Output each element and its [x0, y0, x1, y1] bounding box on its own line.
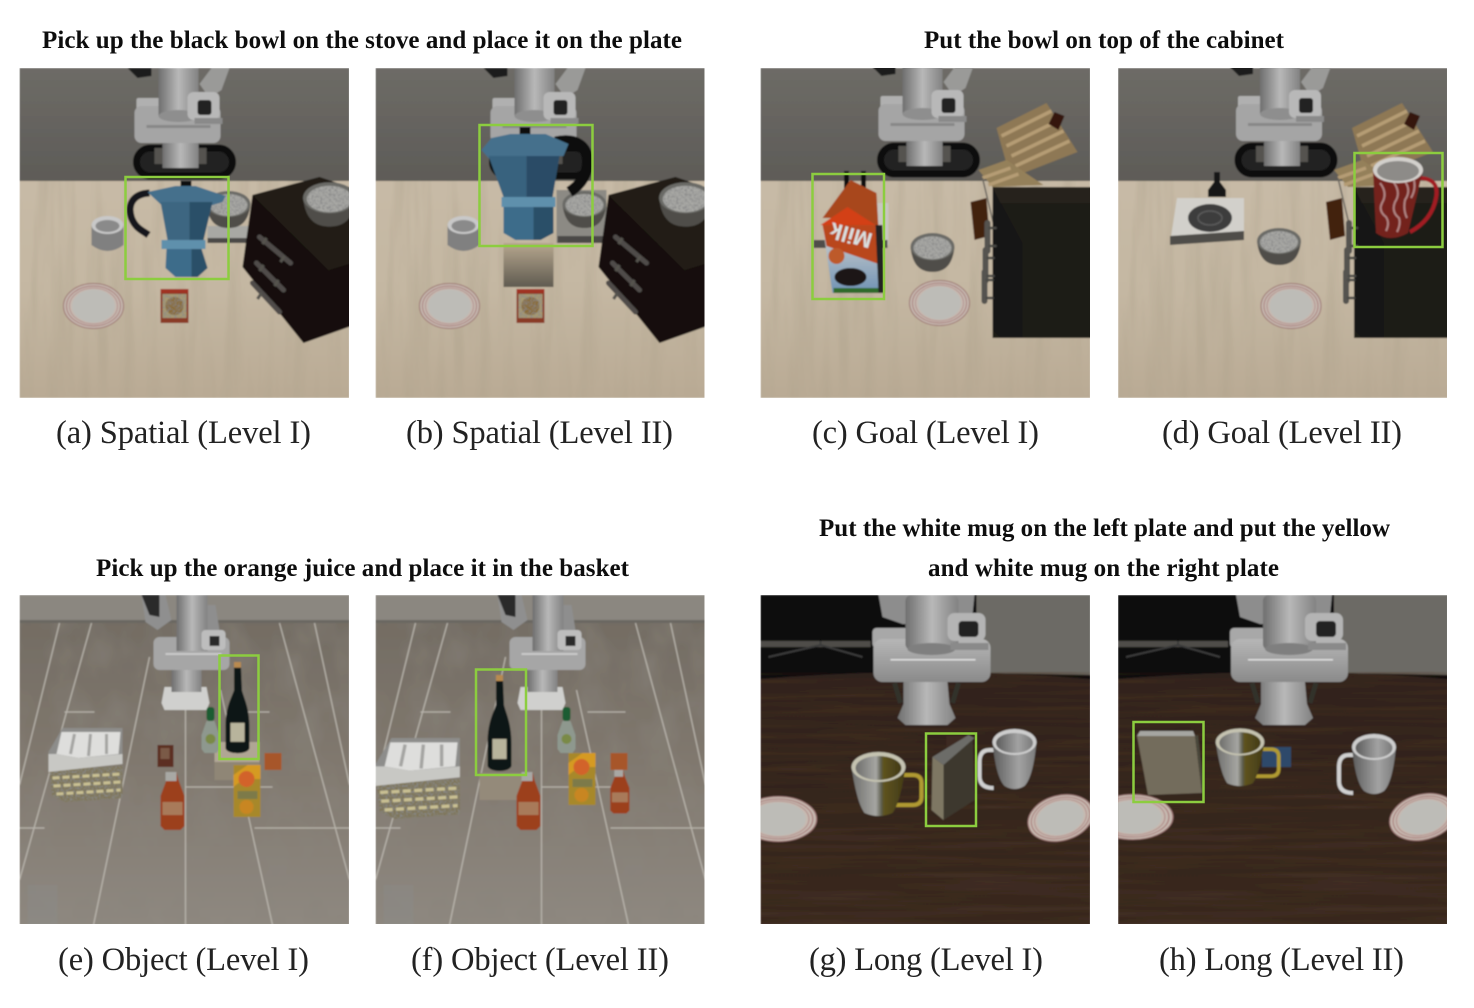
caption c: (c) Goal (Level I) [812, 415, 1039, 451]
panel: e object level I [20, 595, 349, 924]
moka pot [130, 181, 226, 277]
title: goal task: Put the bowl on top of the cabinet [924, 27, 1285, 54]
book [932, 735, 974, 820]
bounding box [1134, 722, 1204, 802]
caption b: (b) Spatial (Level II) [406, 415, 673, 451]
stove and bowl behind [556, 190, 606, 243]
bounding box [812, 174, 884, 299]
stove with burner [1170, 172, 1244, 245]
title: object task: Pick up the orange juice and place it in the basket [96, 555, 630, 582]
panel: d goal level II [1118, 68, 1447, 398]
stove and bowl behind [206, 191, 250, 243]
panel: g long level I [760, 595, 1090, 924]
bounding box [926, 734, 976, 826]
title: long task: and white mug on the right plate [928, 555, 1279, 582]
bounding box [220, 656, 258, 759]
bounding box [126, 177, 228, 279]
title: long task [819, 515, 1390, 582]
caption a: (a) Spatial (Level I) [56, 415, 311, 451]
milk carton: Milk [826, 217, 875, 253]
panel: b spatial level II [376, 68, 704, 398]
stove behind carton [814, 203, 888, 248]
milk carton [820, 171, 884, 293]
bounding box [476, 670, 526, 775]
bounding box [1354, 153, 1442, 247]
caption f: (f) Object (Level II) [411, 942, 669, 978]
red mug [1373, 157, 1437, 238]
book [1137, 731, 1204, 795]
title: long task: Put the white mug on the left plate and put the yellow [819, 515, 1390, 542]
caption g: (g) Long (Level I) [809, 942, 1043, 978]
bounding box [480, 125, 592, 246]
title: spatial task: Pick up the black bowl on the stove and place it on the plate [42, 27, 682, 54]
stand [504, 243, 554, 287]
moka pot large [482, 127, 588, 240]
caption d: (d) Goal (Level II) [1162, 415, 1402, 451]
panel: f object level II [376, 595, 704, 924]
caption h: (h) Long (Level II) [1159, 942, 1404, 978]
panel: a spatial level I [20, 68, 349, 398]
panel: c goal level I [760, 68, 1090, 398]
caption e: (e) Object (Level I) [58, 942, 309, 978]
panel: h long level II [1118, 595, 1447, 924]
